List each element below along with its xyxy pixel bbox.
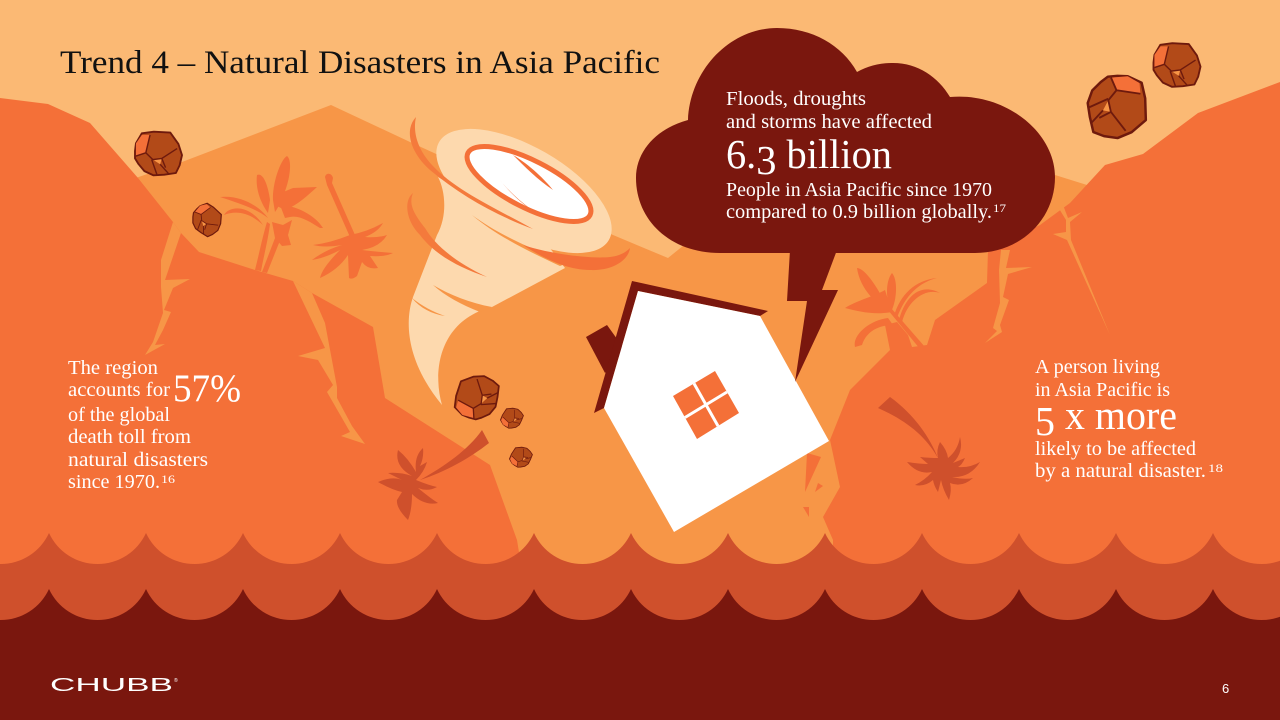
house [586,281,829,532]
cloud text: Floods, droughts [726,89,866,110]
left statistic text: 57% [173,367,241,410]
right statistic text: likely to be affected [1035,439,1196,460]
left cliff [0,98,530,620]
banana plant left [220,156,323,273]
cloud text: and storms have affected [726,112,932,133]
right statistic text: in Asia Pacific is [1035,380,1170,401]
waves: lower band [0,589,1280,720]
left statistic text: accounts for [68,380,171,401]
rock [498,404,526,432]
cloud text: 17 [993,201,1006,215]
tornado [407,104,631,405]
page number: 6 [1222,681,1229,696]
left statistic text: of the global [68,405,171,426]
left statistic text: death toll from [68,427,191,448]
rock [135,132,182,175]
Chubb logo: CHUBB [50,675,173,695]
right cliff [823,82,1280,620]
uprooted plant [312,174,393,279]
left statistic text [68,358,241,493]
page title: Trend 4 – Natural Disasters in Asia Pacific [60,45,660,81]
left statistic text: natural disasters [68,450,208,471]
waves: upper band [0,533,1280,720]
left statistic text: 16 [161,472,175,486]
storm cloud with lightning [636,28,1055,382]
rock [1154,43,1200,87]
palm tree right [878,397,980,500]
palm tree left [378,430,489,520]
rock [452,370,502,424]
background mountains [130,105,1120,600]
rock [1086,74,1148,140]
Chubb logo [50,675,178,695]
cloud text: 3 [756,137,776,183]
rock [507,443,535,471]
left statistic text: The region [68,358,158,379]
right statistic text [1035,357,1223,482]
cloud text: 6. [726,131,757,177]
cloud text [726,89,1006,223]
left statistic text: since 1970. [68,472,160,493]
debris under house [803,453,823,517]
rock [187,200,227,240]
right statistic text: by a natural disaster. [1035,461,1206,482]
cloud text: billion [776,131,892,177]
cloud text: People in Asia Pacific since 1970 [726,180,992,201]
right statistic text: 18 [1208,461,1223,475]
right statistic text: 5 [1035,398,1055,444]
Chubb logo: ® [174,677,178,684]
right statistic text: x more [1055,392,1177,438]
cloud text: compared to 0.9 billion globally. [726,202,992,223]
banana plant right [845,268,940,350]
right statistic text: A person living [1035,357,1160,378]
